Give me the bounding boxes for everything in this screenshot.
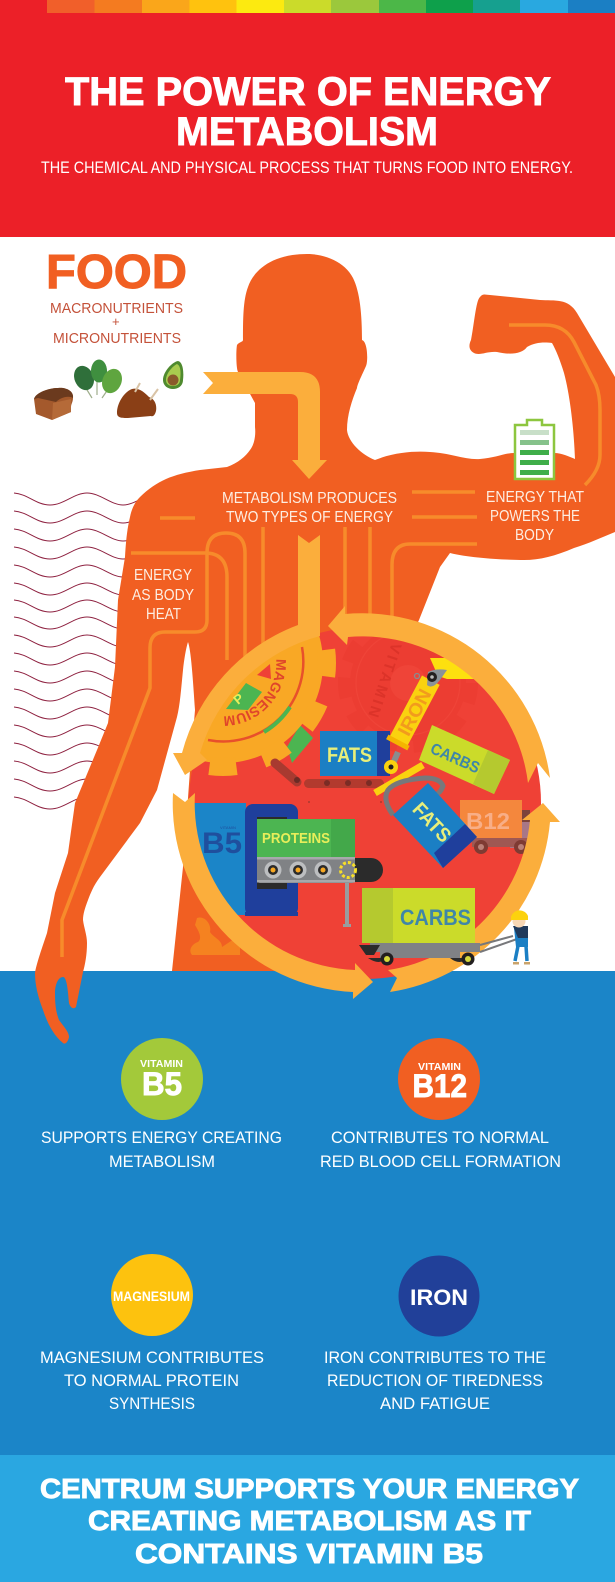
heat waves [14,493,160,809]
label: energy as body heat [132,567,194,623]
label: energy as body heat: HEAT [146,606,181,623]
text: b12 benefit [320,1128,561,1171]
gear pencil: P [230,690,247,707]
panel: footer background [0,1455,615,1582]
body silhouette [35,254,615,1044]
text: b5 benefit: SUPPORTS ENERGY CREATING [41,1128,282,1147]
arrow: upper right arc [328,606,550,783]
arrow: lower right arc [388,803,560,992]
footer statement: CONTAINS VITAMIN B5 [135,1538,483,1569]
arrow: upper left arc [173,622,320,775]
text: iron benefit: REDUCTION OF TIREDNESS [327,1371,543,1390]
robot arm: iron: IRON [394,686,436,740]
machine: vitamin b5 [190,803,298,916]
box: fats on conveyor [320,731,390,776]
conveyor: proteins [257,817,383,927]
iron card [324,1256,546,1413]
arrow: lower left arc [173,793,373,999]
box: carbs tilted: CARBS [428,741,482,777]
label: macronutrients plus micronutrients: MICRONUTRIENTS [53,330,181,347]
cycle arrows ring [173,606,560,999]
machine: vitamin b5: VITAMIN [220,825,236,830]
panel: blue vitamins background [0,971,615,1455]
vitamin b12 card [320,1038,561,1171]
vitamin b5 card [41,1038,282,1171]
badge: iron [398,1256,480,1336]
gear label [212,659,276,716]
icon: spinach leaves [71,360,125,398]
worker figure [511,910,530,964]
text: b5 benefit: METABOLISM [109,1152,215,1171]
icon: bread [34,388,73,420]
box: carbs tilted [419,725,510,794]
arrow stem down to cycle [298,535,320,640]
magnesium card [40,1254,264,1413]
heading: food: FOOD [46,246,187,299]
badge: vitamin b12 [398,1038,480,1120]
gear inner arc [208,647,303,741]
box: proteins: PROTEINS [262,830,330,847]
gear arc green segment [264,707,290,732]
box: fats tilted with strap: FATS [408,799,455,847]
text: magnesium benefit: TO NORMAL PROTEIN [64,1371,239,1390]
title: THE POWER OF ENERGY [65,70,551,114]
label: macronutrients plus micronutrients: + [112,314,120,329]
panel: red header [0,0,615,237]
label: metabolism produces: TWO TYPES OF ENERGY [226,509,393,526]
faded gear watermark: VITAMIN [364,641,404,719]
badge: magnesium: MAGNESIUM [113,1288,190,1304]
green block behind gear [287,725,313,763]
label: energy that powers the body: ENERGY THAT [486,489,584,506]
footer statement: CENTRUM SUPPORTS YOUR ENERGY [40,1473,579,1504]
footer statement [40,1473,579,1569]
title [65,70,551,154]
metabolism red disc [189,627,541,979]
badge: iron: IRON [410,1285,468,1310]
faint logo on torso [190,917,240,955]
text: magnesium benefit: MAGNESIUM CONTRIBUTES [40,1348,264,1367]
badge: vitamin b12: VITAMIN [418,1062,461,1073]
gear pencil [226,683,262,710]
box: fats on conveyor: FATS [327,744,372,767]
label: energy as body heat: ENERGY [134,567,192,584]
text: b5 benefit [41,1128,282,1171]
badge: vitamin b5 [121,1038,203,1120]
label: macronutrients plus micronutrients [50,300,183,347]
label: energy that powers the body [486,489,584,544]
label: energy that powers the body: BODY [515,527,554,544]
label: metabolism produces [222,490,397,526]
badge: vitamin b12: B12 [412,1068,467,1104]
icon: avocado [163,361,183,389]
cart: carbs: CARBS [400,905,471,930]
badge: vitamin b5: VITAMIN [140,1059,183,1070]
machine: vitamin b5: B5 [202,827,242,860]
badge: magnesium [111,1254,193,1336]
text: magnesium benefit [40,1348,264,1413]
robot arm: iron [375,658,475,793]
label: macronutrients plus micronutrients: MACRONUTRIENTS [50,300,183,317]
battery icon [515,420,554,479]
energy pathway lines inside body [62,325,600,957]
label: metabolism produces: METABOLISM PRODUCES [222,490,397,507]
text: b12 benefit: CONTRIBUTES TO NORMAL [331,1128,549,1147]
conveyor: fats [275,763,384,803]
text: iron benefit: IRON CONTRIBUTES TO THE [324,1348,546,1367]
badge: vitamin b5: B5 [142,1066,182,1102]
colour stripe band [47,0,615,13]
gear: magnesium: MAGNESIUM [224,660,286,726]
label: energy that powers the body: POWERS THE [490,508,580,525]
icon: roast chicken [117,383,158,418]
footer statement: CREATING METABOLISM AS IT [88,1505,531,1536]
text: iron benefit [324,1348,546,1413]
box: fats tilted with strap [386,778,477,868]
label: energy as body heat: AS BODY [132,587,194,604]
arrow: food entering body [203,372,327,479]
text: b12 benefit: RED BLOOD CELL FORMATION [320,1152,561,1171]
title: METABOLISM [176,110,438,154]
gear: magnesium [200,636,336,776]
text: iron benefit: AND FATIGUE [380,1394,490,1413]
gear triangle [257,664,271,679]
text: magnesium benefit: SYNTHESIS [109,1394,195,1413]
truck: b12 [460,800,535,854]
box: proteins [257,819,355,857]
cart: carbs [359,888,517,966]
truck: b12: B12 [466,808,510,834]
